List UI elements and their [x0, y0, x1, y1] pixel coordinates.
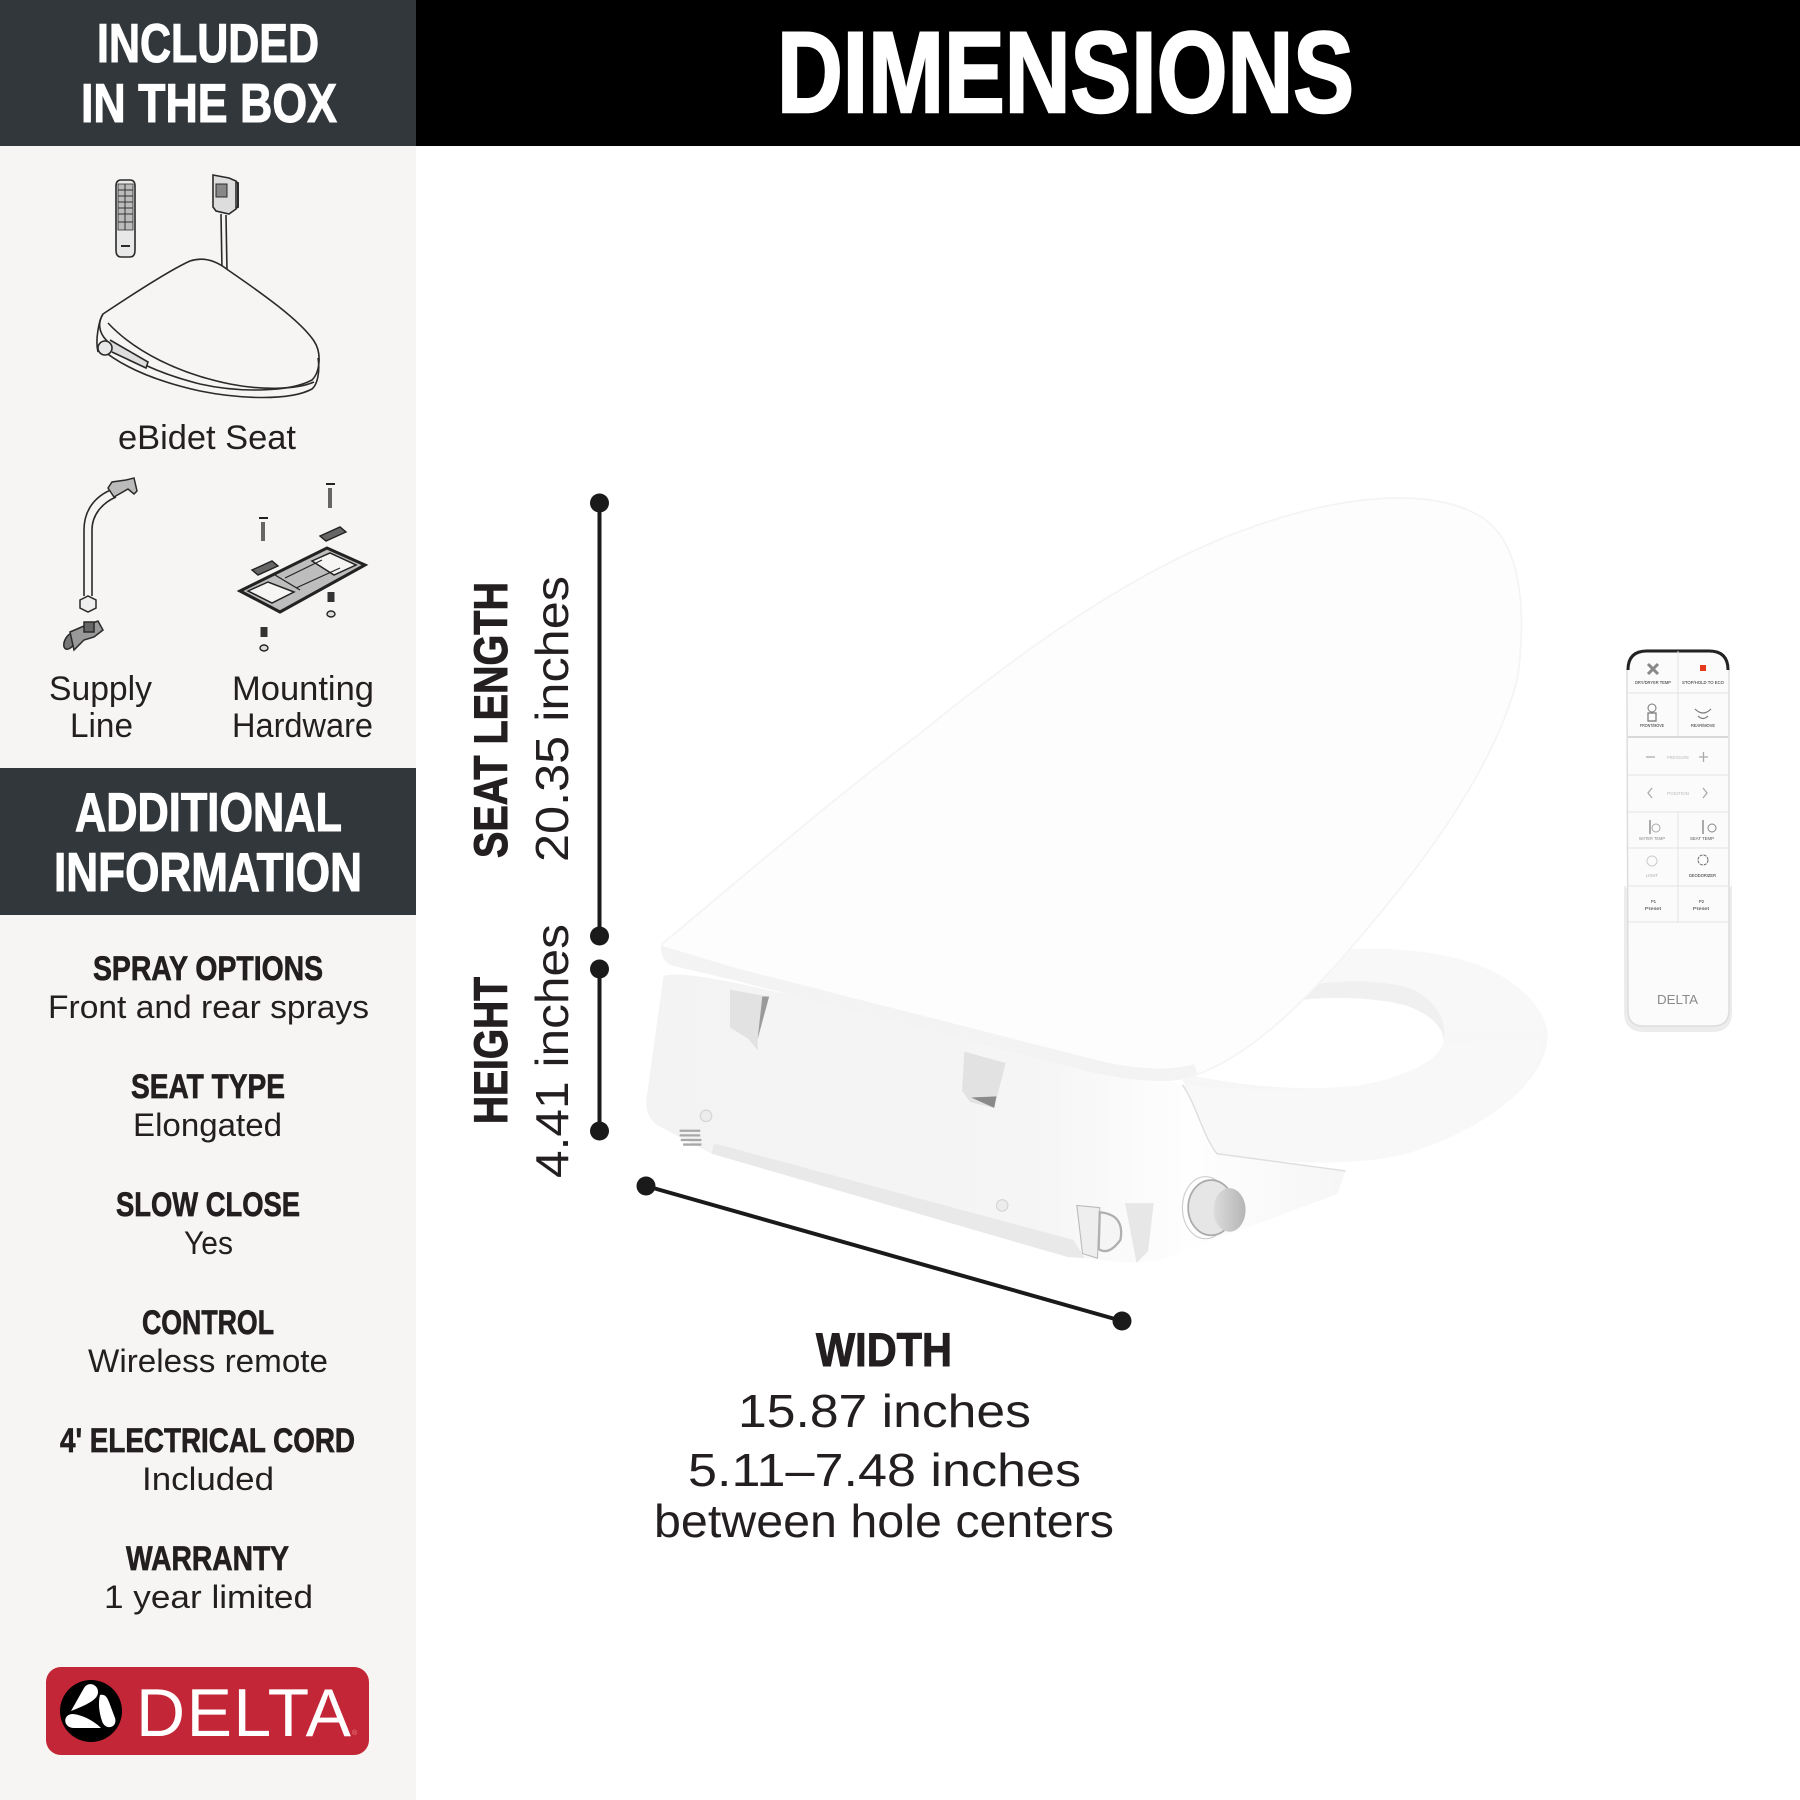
icon: small remote	[116, 180, 135, 257]
illustration: remote control: DEODORIZER	[1689, 873, 1717, 878]
heading: included in the box	[0, 0, 416, 146]
label: seat length	[464, 576, 578, 862]
spec: electrical cord	[60, 1422, 355, 1497]
label: width: WIDTH	[816, 1323, 952, 1376]
label: width: 15.87 inches	[738, 1385, 1031, 1437]
label: supply line	[49, 670, 152, 745]
logo: delta: ®	[352, 1729, 358, 1737]
label: width	[654, 1323, 1114, 1547]
illustration: remote control: DELTA	[1657, 992, 1698, 1007]
hinge: left	[730, 990, 769, 1050]
spec: seat type: Elongated	[133, 1107, 282, 1143]
label: supply line: Supply	[49, 670, 152, 708]
icon: power plug and cord	[213, 175, 238, 271]
logo: delta	[46, 1667, 369, 1755]
spec: warranty	[104, 1540, 313, 1615]
spec: electrical cord: 4' ELECTRICAL CORD	[60, 1422, 355, 1460]
label: seat length: 20.35 inches	[526, 576, 578, 862]
arm seam	[1182, 1085, 1345, 1171]
spec: control	[88, 1304, 328, 1379]
label: height: HEIGHT	[464, 977, 517, 1124]
heading: additional information	[0, 768, 416, 915]
illustration: remote control: REAR/MOVE	[1691, 723, 1715, 728]
spec: slow close: SLOW CLOSE	[116, 1186, 300, 1224]
spec: warranty: 1 year limited	[104, 1579, 313, 1615]
spec: spray options: SPRAY OPTIONS	[93, 950, 323, 988]
label: ebidet seat: eBidet Seat	[118, 419, 297, 457]
label: width: between hole centers	[654, 1495, 1114, 1547]
label: mounting hardware: Mounting	[232, 670, 374, 708]
heading: additional information: ADDITIONAL	[75, 781, 342, 843]
label: width: 5.11–7.48 inches	[688, 1444, 1081, 1496]
illustration: remote control: LIGHT	[1646, 873, 1658, 878]
water connector	[1077, 1203, 1154, 1263]
screw left	[700, 1110, 712, 1122]
illustration: remote control: Preset	[1645, 906, 1662, 911]
spec: electrical cord: Included	[142, 1461, 274, 1497]
heading: included in the box: IN THE BOX	[81, 72, 337, 134]
illustration: remote control: P2	[1699, 899, 1704, 904]
lid edge shading	[662, 946, 1197, 1081]
label: mounting hardware	[232, 670, 374, 745]
ring inner rim shading	[1258, 981, 1444, 1042]
hinge: right	[962, 1052, 1006, 1108]
screw right	[996, 1200, 1008, 1211]
heading: included in the box: INCLUDED	[97, 12, 319, 74]
lid	[662, 498, 1521, 1080]
illustration: remote control: STOP/HOLD TO ECO	[1682, 680, 1724, 685]
illustration: remote control: PRESSURE	[1667, 755, 1689, 760]
spec: spray options: Front and rear sprays	[48, 989, 369, 1025]
spec: spray options	[48, 950, 369, 1025]
dimension line: width	[636, 1176, 1132, 1330]
icon: supply line	[61, 478, 137, 651]
illustration: remote control	[1624, 650, 1732, 1032]
heading: dimensions	[416, 0, 1800, 146]
label: mounting hardware: Hardware	[232, 707, 373, 745]
illustration: remote control: DRY/DRYER TEMP	[1635, 680, 1671, 685]
spec: control: Wireless remote	[88, 1343, 328, 1379]
panel: sidebar background	[0, 0, 416, 1800]
illustration: remote control: FRONT/MOVE	[1640, 723, 1664, 728]
illustration: remote control: SEAT TEMP	[1690, 836, 1714, 841]
label: height: 4.41 inches	[526, 924, 578, 1178]
illustration: remote control: POSITION	[1667, 791, 1689, 796]
illustration: remote control: Preset	[1693, 906, 1710, 911]
illustration: remote control: P1	[1651, 899, 1656, 904]
spec: seat type	[131, 1068, 285, 1143]
spec: control: CONTROL	[142, 1304, 274, 1342]
seat opening	[1182, 998, 1444, 1088]
illustration: bidet seat	[646, 498, 1548, 1263]
label: seat length: SEAT LENGTH	[464, 582, 517, 858]
spec: slow close: Yes	[184, 1225, 233, 1261]
heading: dimensions: DIMENSIONS	[777, 9, 1354, 137]
vent	[680, 1131, 701, 1145]
dimension line: height	[590, 960, 609, 1140]
spec: slow close	[116, 1186, 300, 1261]
seat ring	[1182, 949, 1548, 1162]
label: supply line: Line	[70, 707, 133, 745]
icon: mounting hardware	[240, 484, 365, 651]
control knob	[1182, 1177, 1246, 1239]
label: height	[464, 924, 578, 1178]
icon: seat outline	[97, 259, 319, 398]
arm cover	[1182, 1039, 1542, 1162]
heading: additional information: INFORMATION	[54, 841, 362, 903]
spec: warranty: WARRANTY	[126, 1540, 289, 1578]
base underside strip	[712, 1143, 1085, 1258]
bidet base housing	[646, 974, 1345, 1263]
spec: seat type: SEAT TYPE	[131, 1068, 285, 1106]
icon: ebidet seat line art	[97, 175, 319, 398]
dimension line: seat length	[590, 494, 609, 946]
logo: delta: DELTA	[136, 1675, 352, 1751]
illustration: remote control: WATER TEMP	[1639, 836, 1665, 841]
